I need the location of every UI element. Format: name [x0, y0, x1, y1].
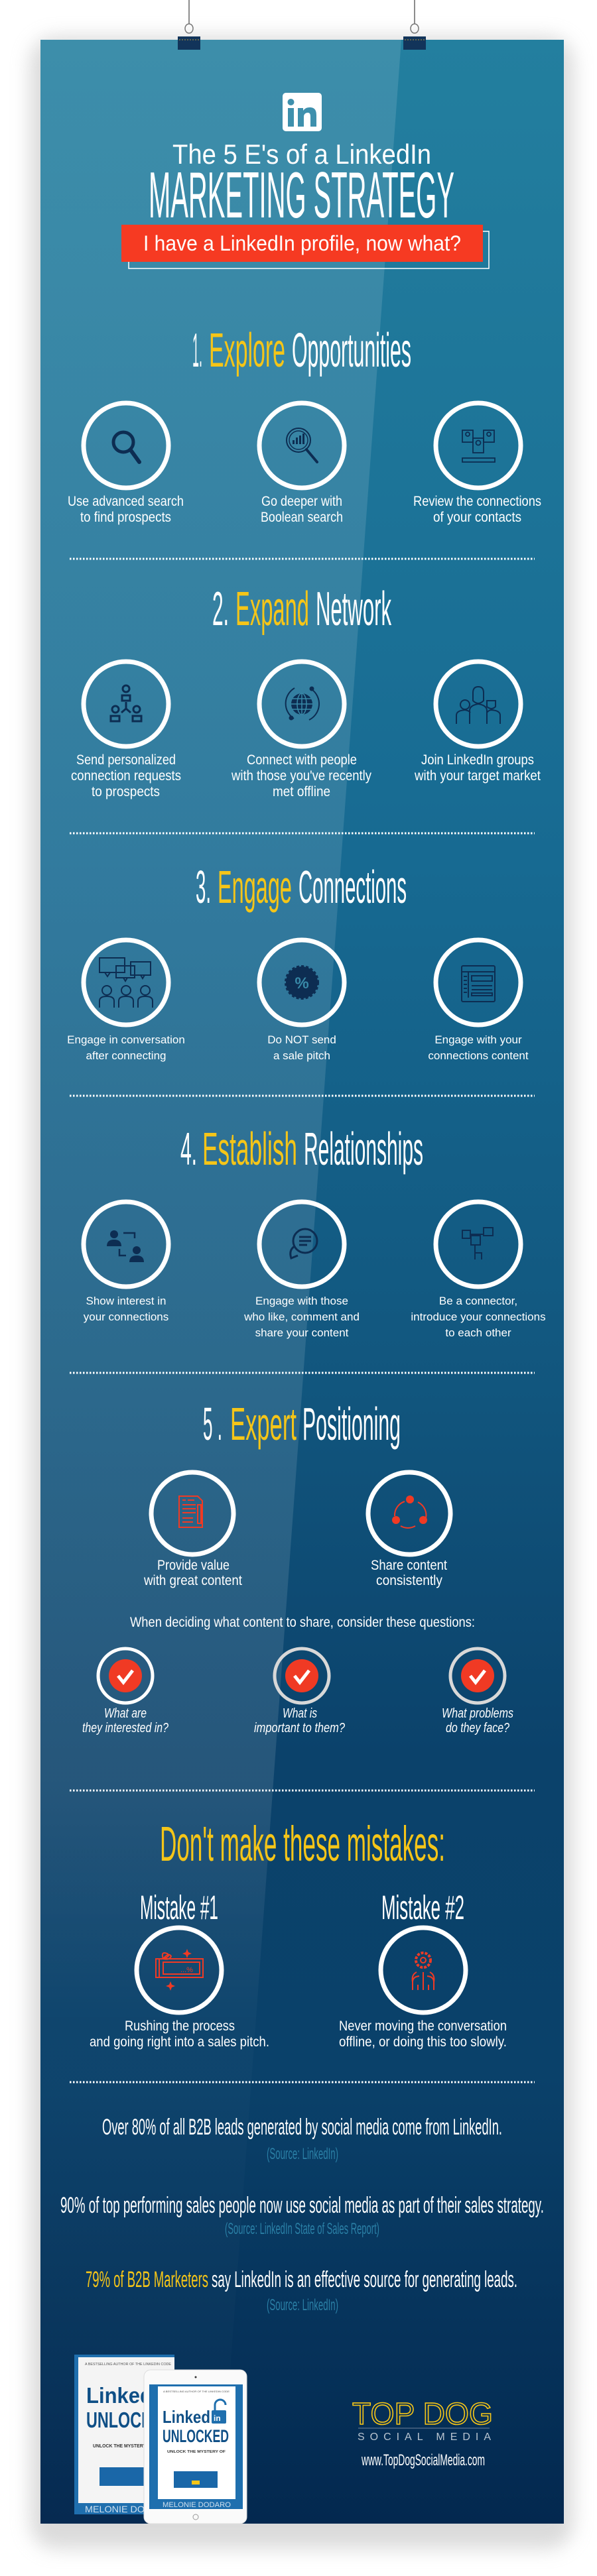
item: provide value — [143, 1472, 242, 1588]
check: important: important to them? — [254, 1721, 346, 1735]
text: Positioning — [302, 1398, 401, 1450]
item: engage with likers — [243, 1202, 360, 1339]
item: boolean search: Boolean search — [261, 510, 343, 525]
item: no sale pitch: a sale pitch — [273, 1049, 330, 1062]
item: globe: Connect with people — [247, 752, 357, 768]
subtitle banner: I have a LinkedIn profile, now what? — [143, 231, 461, 255]
mistake 2: Never moving the conversation — [339, 2019, 507, 2034]
panel: question checks — [82, 1649, 513, 1735]
text: questions intro: When deciding what content to share, consider these questions: — [130, 1615, 475, 1630]
mistake 2: offline, or doing this too slowly. — [339, 2034, 507, 2050]
heading: 1. Explore Opportunities: 1. — [192, 324, 202, 377]
tablet: in — [214, 2414, 221, 2423]
item: boolean search: Go deeper with — [261, 494, 342, 509]
item: groups: Join LinkedIn groups — [421, 752, 534, 768]
logo: Top Dog Social Media: www.TopDogSocialMedia.com — [361, 2451, 485, 2469]
panel: engage items — [67, 940, 529, 1062]
printed book: MELONIE DO — [85, 2504, 145, 2514]
item: connections content — [428, 940, 529, 1062]
item: share content: consistently — [376, 1573, 442, 1588]
stat 1: (Source: LinkedIn) — [267, 2145, 338, 2163]
item: review connections: of your contacts — [433, 510, 521, 525]
heading: 5. Expert Positioning — [203, 1398, 401, 1450]
tablet: MELONIE DODARO — [163, 2501, 231, 2509]
mistake 1: Rushing the process — [125, 2019, 235, 2034]
panel: establish items — [84, 1202, 546, 1339]
item: review connections: Review the connections — [413, 494, 541, 509]
panel: expert items — [143, 1472, 450, 1588]
subtitle banner — [121, 225, 489, 268]
heading: 3. Engage Connections: Engage — [218, 861, 292, 913]
item: groups — [414, 662, 541, 784]
item: personalized requests: connection requests — [71, 768, 181, 784]
stat 3: (Source: LinkedIn) — [267, 2296, 338, 2314]
mistake 1: and going right into a sales pitch. — [90, 2034, 269, 2050]
stat 3: 79% of B2B Marketers — [86, 2267, 208, 2292]
item: globe — [231, 662, 371, 799]
item: personalized requests: Send personalized — [76, 752, 176, 768]
tablet — [144, 2370, 247, 2524]
mistake 1: ...% — [180, 1966, 193, 1974]
mistake 1 — [90, 1889, 269, 2050]
heading: 4. Establish Relationships: 4. — [180, 1123, 197, 1175]
item: engage with likers: who like, comment and — [243, 1311, 360, 1323]
panel: explore items — [68, 403, 541, 525]
item: advanced search: to find prospects — [80, 510, 171, 525]
heading: 2. Expand Network: 2. — [212, 583, 229, 636]
tablet: A BESTSELLING AUTHOR OF THE LINKEDIN CODE — [163, 2390, 230, 2393]
heading: 1. Explore Opportunities: Explore — [209, 324, 285, 377]
item: show interest: your connections — [84, 1311, 168, 1323]
item: advanced search — [68, 403, 184, 525]
tablet: UNLOCK THE MYSTERY OF — [167, 2450, 226, 2454]
tablet: UNLOCKED — [163, 2426, 229, 2446]
item: connector: introduce your connections — [411, 1311, 546, 1323]
logo: Top Dog Social Media: SOCIAL MEDIA — [358, 2431, 491, 2443]
printed book — [74, 2355, 174, 2514]
check: interested: they interested in? — [82, 1721, 169, 1735]
item: globe: met offline — [273, 784, 330, 799]
mistake 1: Mistake #1 — [140, 1889, 218, 1926]
printed book: A BESTSELLING AUTHOR OF THE LINKEDIN CODE — [85, 2363, 172, 2367]
stat 2 — [60, 2193, 544, 2238]
heading: 2. Expand Network: Expand — [235, 583, 309, 636]
item: no sale pitch: Do NOT send — [267, 1033, 336, 1046]
item: engage with likers: share your content — [255, 1326, 349, 1339]
item: no sale pitch: % — [295, 974, 309, 992]
item: provide value: Provide value — [157, 1558, 230, 1573]
item: advanced search: Use advanced search — [68, 494, 184, 509]
clip: left — [178, 0, 200, 50]
item: conversation: after connecting — [86, 1049, 166, 1062]
item: share content — [368, 1472, 450, 1588]
title — [149, 139, 454, 231]
item: globe: with those you've recently — [231, 768, 371, 784]
logo: Top Dog Social Media: TOP DOG — [352, 2396, 493, 2431]
heading: 5. Expert Positioning: Expert — [230, 1398, 297, 1450]
item: provide value: with great content — [143, 1573, 242, 1588]
check: important — [254, 1649, 346, 1735]
check: important: What is — [283, 1706, 317, 1721]
item: share content: Share content — [371, 1558, 447, 1573]
heading: 4. Establish Relationships: Establish — [202, 1123, 297, 1175]
heading: 3. Engage Connections: 3. — [196, 861, 211, 913]
item: review connections — [413, 403, 541, 525]
item: groups: with your target market — [414, 768, 541, 784]
logo: Top Dog Social Media — [352, 2396, 493, 2469]
text: Connections — [298, 861, 407, 913]
check: problems — [442, 1649, 513, 1735]
item: connector: Be a connector, — [439, 1295, 517, 1307]
item: connector — [411, 1202, 546, 1339]
item: personalized requests — [71, 662, 181, 799]
heading: 5. Expert Positioning: 5 . — [203, 1398, 222, 1450]
mistake 2 — [339, 1889, 507, 2050]
item: engage with likers: Engage with those — [255, 1295, 348, 1307]
tablet: Linked — [163, 2407, 210, 2427]
stat 2: (Source: LinkedIn State of Sales Report) — [225, 2220, 379, 2238]
check: problems: What problems — [442, 1706, 513, 1721]
check: problems: do they face? — [446, 1721, 510, 1735]
mistake 2: Mistake #2 — [381, 1889, 464, 1926]
panel: mistakes — [90, 1889, 507, 2050]
text: Network — [316, 583, 391, 636]
title: The 5 E's of a LinkedIn — [172, 139, 431, 170]
item: conversation — [67, 940, 185, 1062]
printed book: UNLOCK — [86, 2408, 153, 2432]
book: LinkedIn Unlocked — [74, 2355, 247, 2524]
check: interested — [82, 1649, 169, 1735]
stat 3 — [86, 2267, 517, 2314]
item: boolean search — [259, 403, 344, 525]
item: show interest: Show interest in — [86, 1295, 166, 1307]
clip: right — [403, 0, 426, 50]
text: Opportunities — [292, 324, 411, 377]
check: interested: What are — [104, 1706, 147, 1721]
item: no sale pitch — [259, 940, 344, 1062]
text: Relationships — [304, 1123, 423, 1175]
item: conversation: Engage in conversation — [67, 1033, 185, 1046]
item: show interest — [84, 1202, 168, 1323]
printed book: UNLOCK THE MYSTERY — [93, 2444, 146, 2449]
icon: linkedin logo — [283, 93, 322, 131]
item: connections content: Engage with your — [434, 1033, 522, 1046]
item: personalized requests: to prospects — [92, 784, 160, 799]
printed book: Linked — [86, 2383, 153, 2408]
item: connections content: connections content — [428, 1049, 529, 1062]
stat 1 — [102, 2115, 502, 2163]
item: connector: to each other — [445, 1326, 511, 1339]
panel: expand items — [71, 662, 541, 799]
